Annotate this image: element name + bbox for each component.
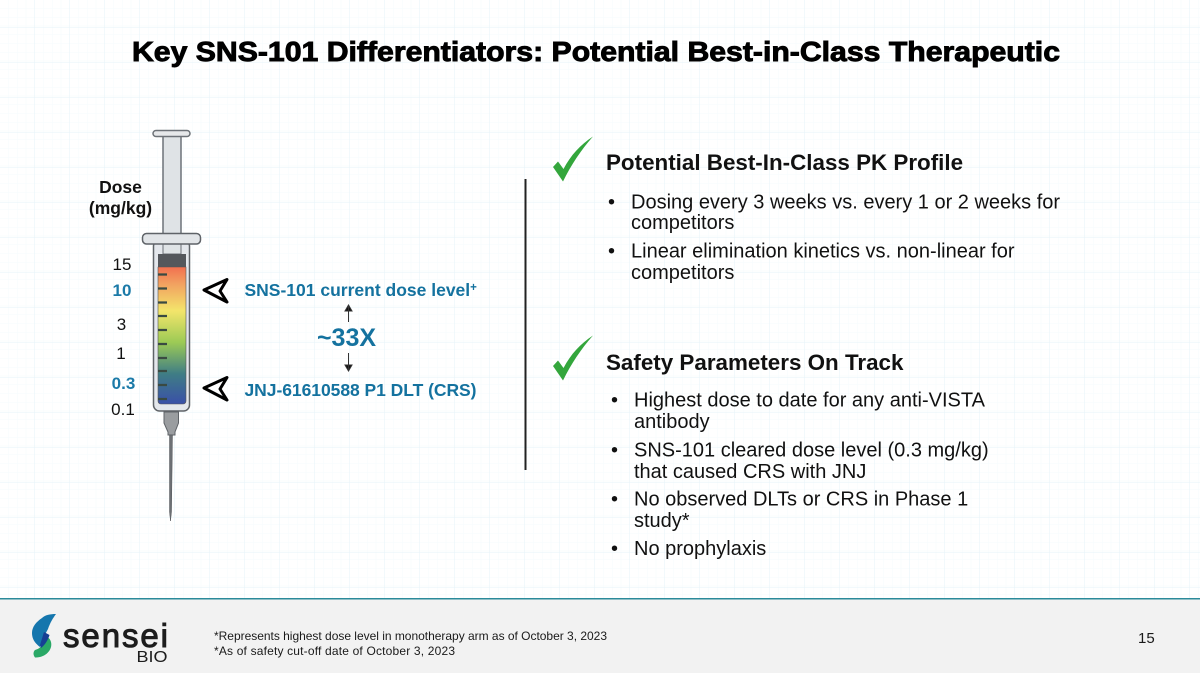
logo mark	[32, 614, 56, 658]
icon: check mark 1	[553, 136, 593, 182]
callout: SNS-101 dose: +	[470, 282, 477, 294]
logo: Sensei Bio	[32, 614, 168, 666]
bullet list: PK: •	[608, 240, 615, 262]
icon: syringe	[142, 130, 200, 521]
multiplier: ~33X	[317, 324, 376, 352]
heading: safety: Safety Parameters On Track	[606, 350, 904, 375]
bullet list: safety: No observed DLTs or CRS in Phase 1	[634, 488, 968, 510]
syringe tick marks	[158, 274, 167, 399]
bullet list: safety: •	[611, 440, 618, 462]
bullet list: safety: •	[611, 538, 618, 560]
bullet list: PK: Linear elimination kinetics vs. non-linear for	[631, 240, 1015, 262]
logo wordmark: sensei	[63, 617, 168, 654]
logo sub-brand: BIO	[136, 649, 168, 666]
syringe barrel	[154, 240, 190, 411]
arrow up	[345, 305, 352, 322]
dose axis label: (mg/kg)	[89, 198, 152, 218]
arrow down	[345, 353, 352, 371]
dose scale: 1	[116, 344, 126, 363]
bullet list: safety: study*	[634, 510, 690, 532]
bullet list: safety: •	[611, 488, 618, 510]
bullet list: safety	[611, 390, 989, 560]
dose scale: 3	[117, 315, 126, 334]
panel: safety	[606, 350, 989, 560]
bullet list: safety: •	[611, 390, 618, 412]
bullet list: PK: •	[608, 192, 615, 214]
page number: 15	[1138, 630, 1155, 647]
heading: PK profile: Potential Best-In-Class PK Profile	[606, 150, 963, 175]
syringe flange	[142, 234, 200, 244]
dose scale: 15	[113, 255, 131, 274]
icon: check mark 2	[553, 336, 593, 380]
footer band	[0, 598, 1200, 673]
panel: PK profile	[606, 150, 1060, 284]
bullet list: PK	[608, 192, 1060, 284]
footnotes: *Represents highest dose level in monotherapy arm as of October 3, 2023	[214, 629, 607, 643]
bullet list: safety: that caused CRS with JNJ	[634, 461, 866, 483]
syringe plunger	[153, 130, 190, 235]
bullet list: safety: SNS-101 cleared dose level (0.3 mg/kg)	[634, 440, 989, 462]
footnotes	[214, 629, 607, 658]
syringe needle	[164, 412, 178, 521]
dose axis label: Dose	[99, 177, 142, 197]
bullet list: safety: Highest dose to date for any anti-VISTA	[634, 390, 986, 412]
bullet list: safety: No prophylaxis	[634, 538, 766, 560]
dose scale: 10	[113, 281, 131, 300]
icon: pointer arrow bottom	[204, 378, 227, 400]
dose scale	[111, 255, 135, 419]
dose scale: 0.3	[112, 374, 135, 393]
title: Key SNS-101 Differentiators: Potential Best-in-Class Therapeutic	[132, 36, 1060, 67]
callout: JNJ dose: JNJ-61610588 P1 DLT (CRS)	[244, 380, 476, 400]
bullet list: PK: competitors	[631, 262, 734, 284]
icon: pointer arrow top	[204, 280, 227, 302]
bullet list: safety: antibody	[634, 411, 710, 433]
vertical divider	[524, 179, 526, 470]
dose scale: 0.1	[111, 400, 135, 419]
footnotes: *As of safety cut-off date of October 3, 2023	[214, 644, 455, 658]
callout: SNS-101 dose: SNS-101 current dose level	[244, 280, 470, 300]
bullet list: PK: Dosing every 3 weeks vs. every 1 or 2 weeks for	[631, 192, 1060, 214]
bullet list: PK: competitors	[631, 212, 734, 234]
